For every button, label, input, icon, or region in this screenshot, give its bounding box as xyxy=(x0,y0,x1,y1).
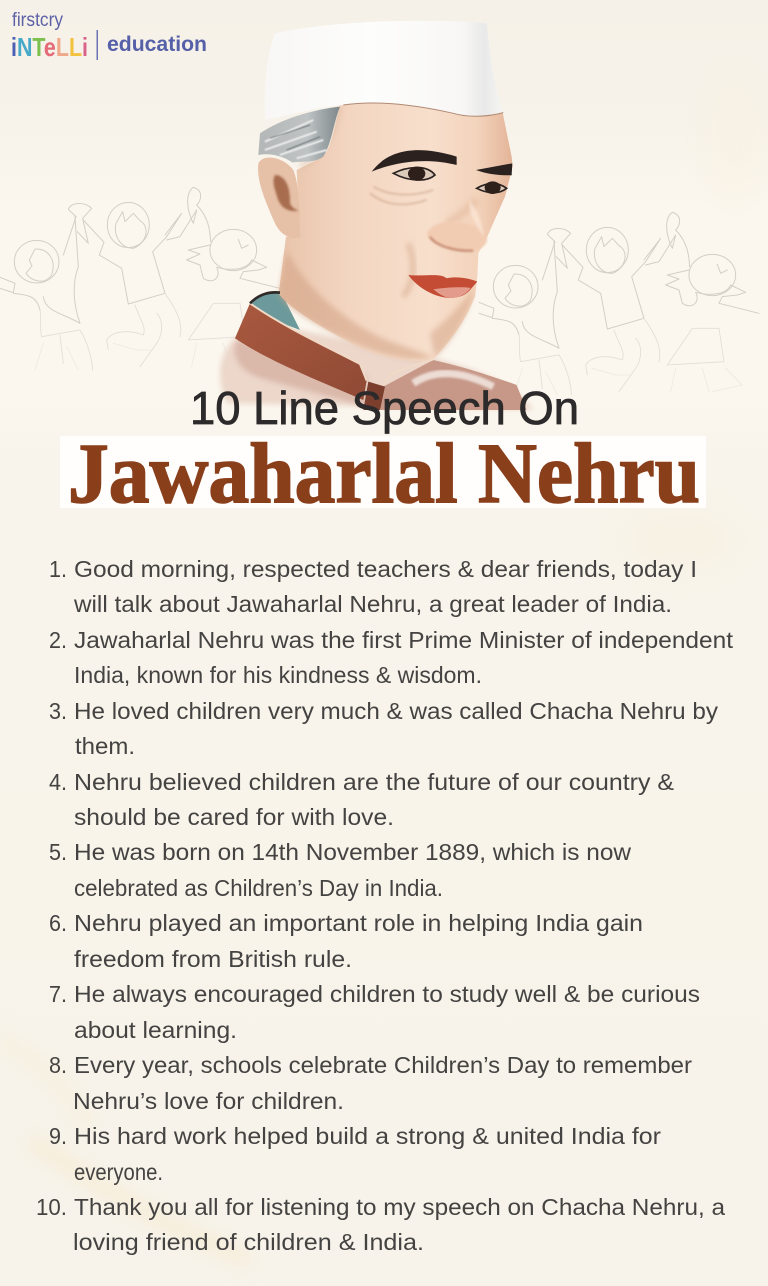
logo: firstcry wordmark: firstcry xyxy=(12,10,63,31)
portrait: shoulders and shirt xyxy=(220,330,533,410)
item 9: His hard work helped build a strong & united India for xyxy=(74,1123,661,1149)
item 10: 10. xyxy=(36,1194,67,1220)
item 8: 8. xyxy=(49,1052,67,1078)
item 1: 1. xyxy=(49,556,67,582)
portrait: eyebrows xyxy=(372,150,512,175)
item 1: will talk about Jawaharlal Nehru, a great leader of India. xyxy=(73,591,672,617)
item 7: 7. xyxy=(49,981,67,1007)
item 2: India, known for his kindness & wisdom. xyxy=(74,662,482,688)
illustration: children line art, right xyxy=(479,212,759,395)
item 6: Nehru played an important role in helping India gain xyxy=(74,910,643,936)
item 7: He always encouraged children to study well & be curious xyxy=(74,981,700,1007)
illustration: children line art, left xyxy=(0,187,280,370)
item 10: Thank you all for listening to my speech on Chacha Nehru, a xyxy=(74,1194,726,1220)
portrait: facial shading xyxy=(279,107,477,359)
logo: divider xyxy=(96,30,98,60)
portrait: eyes xyxy=(393,167,507,194)
portrait: grey hair xyxy=(258,107,340,163)
logo: intelli wordmark: iNTeLLi xyxy=(11,32,88,62)
item 3: 3. xyxy=(49,698,67,724)
item 7 xyxy=(49,981,700,1043)
item 8: Every year, schools celebrate Children’s Day to remember xyxy=(74,1052,692,1078)
portrait: collar xyxy=(235,292,433,410)
item 4: 4. xyxy=(49,769,67,795)
item 10 xyxy=(36,1194,726,1255)
heading: name: Jawaharlal Nehru xyxy=(68,425,700,521)
item 5: celebrated as Children’s Day in India. xyxy=(74,875,443,901)
item 7: about learning. xyxy=(74,1017,237,1043)
item 4 xyxy=(49,769,674,830)
portrait: neck lining xyxy=(250,293,300,330)
portrait: white cap xyxy=(265,21,503,120)
item 2: Jawaharlal Nehru was the first Prime Minister of independent xyxy=(74,627,733,653)
item 3 xyxy=(49,698,718,759)
item 2 xyxy=(49,627,733,688)
portrait: lips xyxy=(408,275,477,298)
item 6: freedom from British rule. xyxy=(74,946,352,972)
portrait: ear xyxy=(258,158,301,238)
item 10: loving friend of children & India. xyxy=(73,1229,424,1255)
item 8: Nehru’s love for children. xyxy=(73,1088,344,1114)
heading: Jawaharlal Nehru banner xyxy=(60,425,706,521)
item 6 xyxy=(49,910,643,972)
logo: FirstCry Intelli education xyxy=(11,10,207,62)
item 6: 6. xyxy=(49,910,67,936)
portrait: face xyxy=(279,103,513,361)
speech list: ten numbered lines xyxy=(36,556,733,1255)
item 8 xyxy=(49,1052,692,1114)
item 2: 2. xyxy=(49,627,67,653)
item 5: 5. xyxy=(49,839,67,865)
item 5 xyxy=(49,839,632,901)
item 9: everyone. xyxy=(74,1159,163,1185)
item 5: He was born on 14th November 1889, which is now xyxy=(74,839,632,865)
logo: education label: education xyxy=(107,33,207,56)
item 1 xyxy=(49,556,697,617)
portrait: Jawaharlal Nehru xyxy=(220,21,533,410)
item 1: Good morning, respected teachers & dear friends, today I xyxy=(74,556,697,582)
item 3: them. xyxy=(75,733,135,759)
item 3: He loved children very much & was called Chacha Nehru by xyxy=(74,698,718,724)
heading: white banner xyxy=(60,436,706,508)
item 9: 9. xyxy=(49,1123,67,1149)
title: 10 Line Speech On: 10 Line Speech On xyxy=(190,382,579,434)
item 4: Nehru believed children are the future of our country & xyxy=(74,769,674,795)
item 4: should be cared for with love. xyxy=(74,804,394,830)
portrait: nose xyxy=(427,200,487,251)
item 9 xyxy=(49,1123,661,1185)
